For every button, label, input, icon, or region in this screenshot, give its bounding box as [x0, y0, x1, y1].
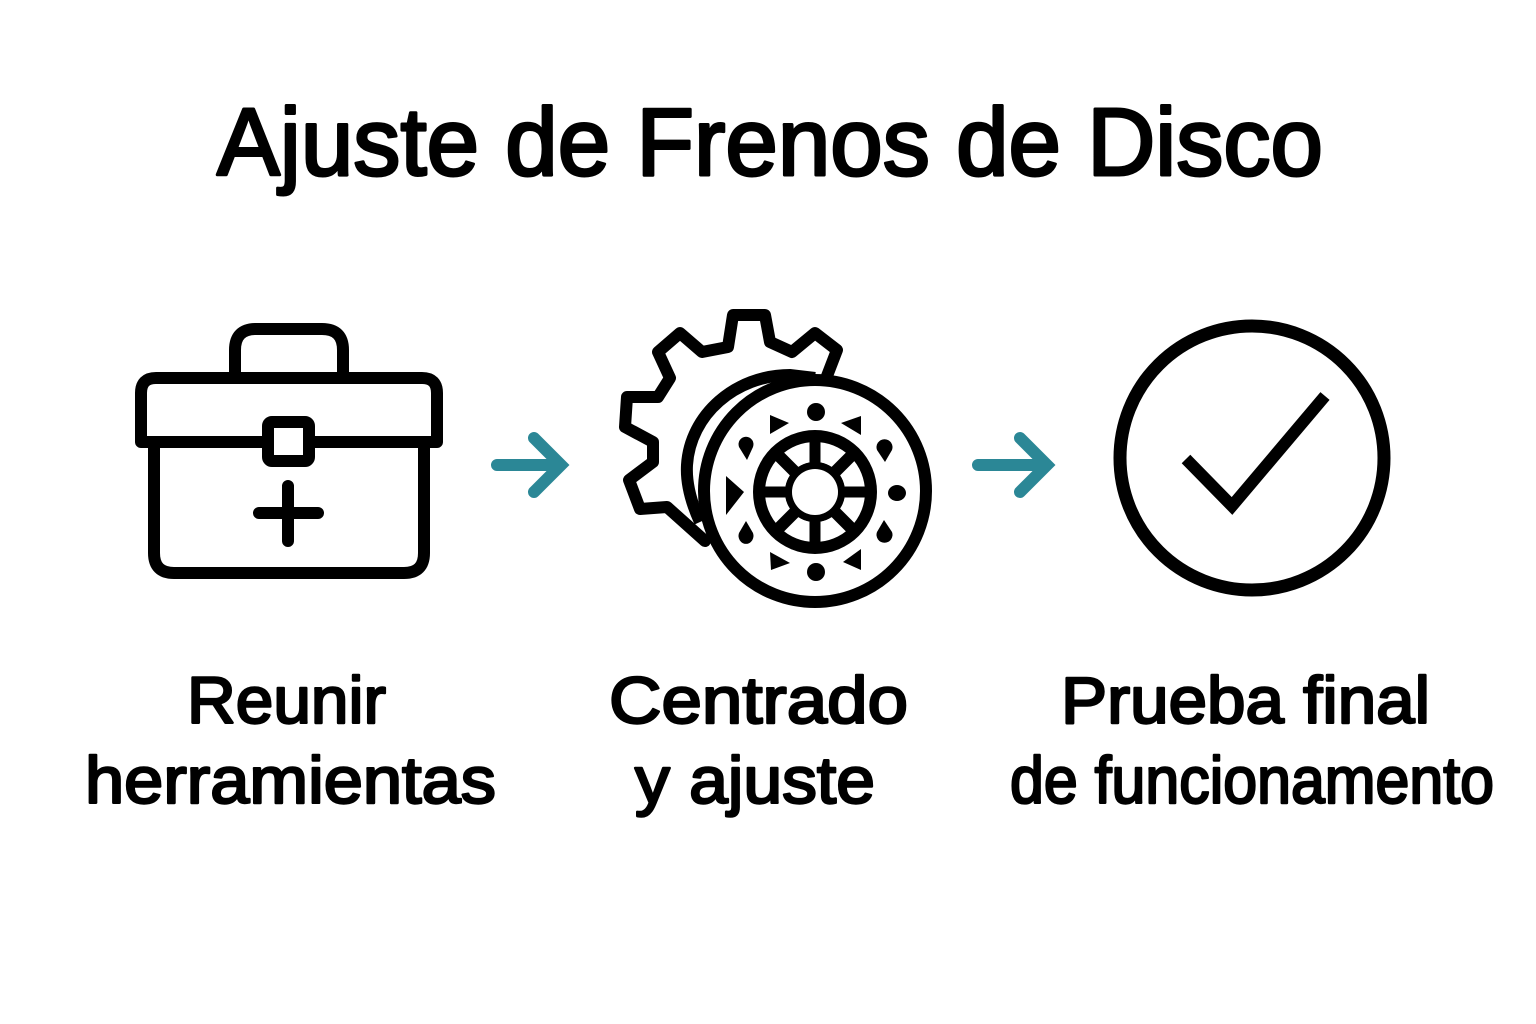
arrow: step 2 to step 3	[978, 438, 1047, 492]
label: step 3: Prueba final	[1061, 663, 1430, 737]
label: step 2	[609, 663, 908, 817]
arrow: step 1 to step 2	[497, 438, 561, 492]
gear outline	[625, 315, 837, 541]
label: step 2: y ajuste	[635, 743, 875, 817]
icon: gear and brake disc	[625, 315, 926, 602]
label: step 3: de funcionamento	[1010, 743, 1494, 817]
icon: toolbox	[141, 329, 437, 573]
label: step 1: herramientas	[85, 743, 496, 817]
front disc	[704, 380, 926, 602]
rear disc edge	[687, 375, 815, 522]
label: step 1: Reunir	[187, 663, 386, 737]
vent holes	[726, 403, 906, 581]
rotor hub	[753, 430, 877, 554]
title: Ajuste de Frenos de Disco	[217, 89, 1323, 196]
label: step 2: Centrado	[609, 663, 908, 737]
label: step 1	[85, 663, 496, 817]
label: step 3	[1010, 663, 1494, 817]
icon: check circle	[1120, 326, 1384, 590]
